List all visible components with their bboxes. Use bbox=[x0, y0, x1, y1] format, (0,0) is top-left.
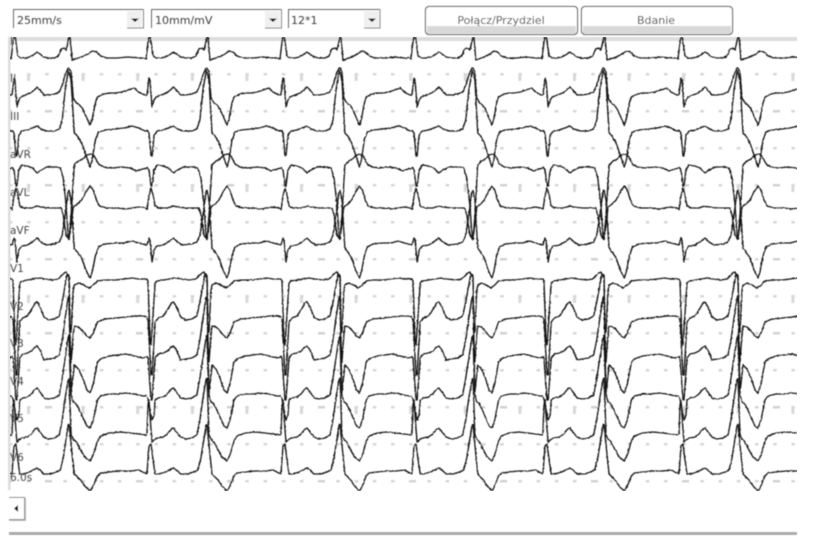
trace: lead I bbox=[0, 37, 812, 60]
lead labels: V3 bbox=[10, 338, 24, 350]
lead labels bbox=[10, 36, 32, 484]
lead labels: V5 bbox=[10, 413, 24, 425]
trace: lead aVL bbox=[0, 186, 812, 240]
button: examination bbox=[582, 6, 732, 34]
lead labels: aVR bbox=[10, 149, 31, 161]
trace: lead V6 bbox=[0, 424, 812, 491]
dropdown: paper speed bbox=[14, 10, 144, 28]
horizontal scroll bar bbox=[9, 532, 797, 535]
trace: lead aVF bbox=[0, 190, 812, 278]
lead labels: V4 bbox=[10, 376, 24, 388]
scroll left button bbox=[9, 498, 26, 520]
trace: lead V2 bbox=[0, 274, 812, 375]
trace: lead V3 bbox=[0, 296, 812, 400]
time axis dotted line bbox=[10, 486, 797, 488]
trace: lead V4 bbox=[0, 335, 812, 428]
dropdown: paper speed: 25mm/s bbox=[17, 14, 62, 27]
lead labels: V1 bbox=[10, 263, 24, 275]
lead labels: II bbox=[10, 73, 16, 85]
lead labels: V2 bbox=[10, 301, 24, 313]
dropdown: layout: 12*1 bbox=[291, 14, 318, 27]
button: connect/assign: Połącz/Przydziel bbox=[457, 14, 545, 27]
lead labels: aVF bbox=[10, 225, 30, 237]
lead labels: III bbox=[10, 111, 19, 123]
trace: lead III bbox=[0, 70, 812, 167]
dropdown: layout bbox=[288, 10, 380, 28]
trace: lead V1 bbox=[0, 272, 812, 345]
button: connect/assign bbox=[426, 6, 578, 34]
trace: lead II bbox=[0, 68, 812, 125]
trace: lead V5 bbox=[0, 378, 812, 461]
button: examination: Bdanie bbox=[637, 14, 675, 27]
lead labels: I bbox=[10, 36, 13, 48]
dropdown: gain: 10mm/mV bbox=[155, 14, 213, 27]
lead labels: 6.0s bbox=[10, 472, 32, 484]
lead labels: aVL bbox=[10, 187, 30, 199]
dropdown: gain bbox=[152, 10, 282, 28]
trace: lead aVR bbox=[0, 154, 812, 240]
lead labels: V6 bbox=[10, 452, 24, 464]
